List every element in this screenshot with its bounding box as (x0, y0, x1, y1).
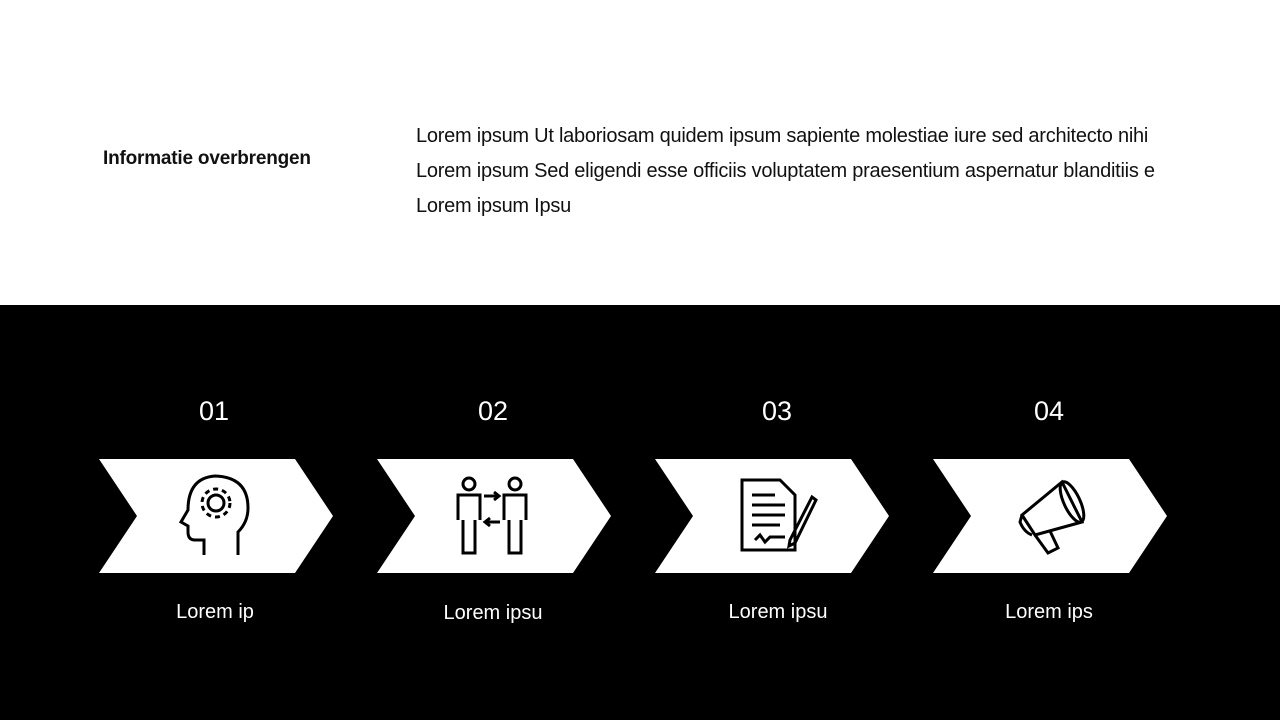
icon: head with gear (181, 476, 248, 555)
step numbers: 01 (199, 396, 229, 426)
step labels (176, 601, 1093, 624)
step labels: Lorem ip (176, 601, 254, 623)
icon: megaphone (1020, 479, 1089, 553)
text block: Lorem ipsum Ipsu (416, 195, 571, 217)
text block: Lorem ipsum Ut laboriosam quidem ipsum sapiente molestiae iure sed architecto nihi (416, 125, 1148, 147)
step numbers: 03 (762, 396, 792, 426)
icon: two people exchanging (458, 478, 526, 553)
step numbers: 04 (1034, 396, 1064, 426)
icon: document with pen (742, 480, 816, 550)
step labels: Lorem ipsu (729, 601, 827, 623)
heading: Informatie overbrengen (103, 148, 311, 169)
step numbers: 02 (478, 396, 508, 426)
text block: Lorem ipsum Sed eligendi esse officiis voluptatem praesentium aspernatur blanditiis e (416, 160, 1155, 182)
step labels: Lorem ips (1005, 601, 1093, 623)
panel: steps (0, 305, 1280, 720)
step numbers (199, 396, 1064, 426)
text block (416, 125, 1155, 217)
step labels: Lorem ipsu (444, 602, 542, 624)
